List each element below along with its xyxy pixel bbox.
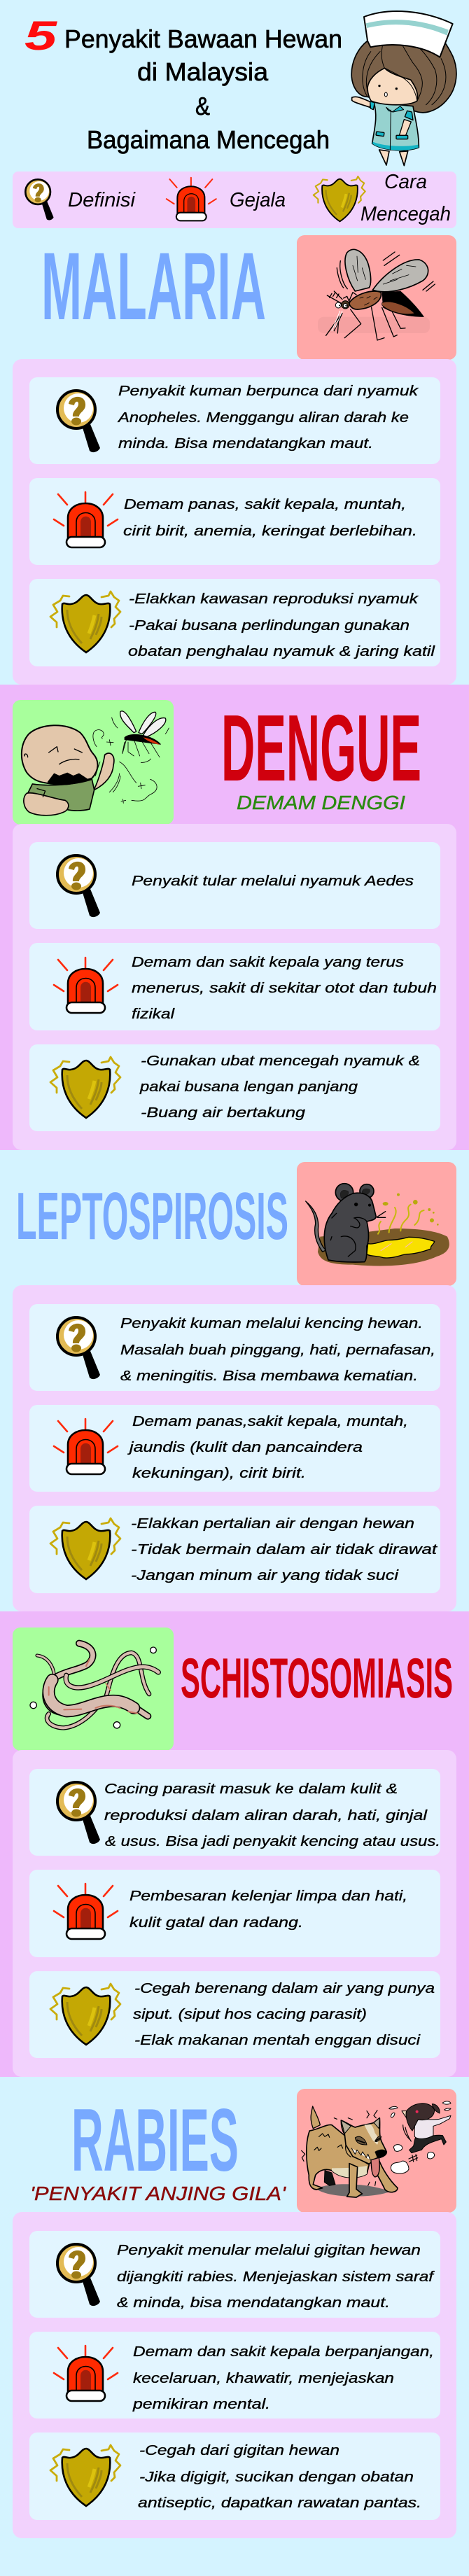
text: malaria definition bbox=[117, 383, 419, 451]
text: rabies symptoms: pemikiran mental. bbox=[132, 2396, 270, 2412]
text: dengue symptoms: menerus, sakit di sekitar otot dan tubuh bbox=[132, 980, 437, 996]
illustration card: mosquito bbox=[297, 235, 456, 360]
legend icon: siren bbox=[167, 178, 216, 220]
icon: shield bbox=[50, 592, 120, 652]
text: dengue definition: Penyakit tular melalui nyamuk Aedes bbox=[132, 873, 414, 889]
icon: shield bbox=[50, 1518, 120, 1579]
text: rabies prevention: -Jika digigit, sucikan dengan obatan bbox=[139, 2469, 414, 2485]
title bbox=[24, 13, 342, 154]
text: rabies prevention: antiseptic, dapatkan rawatan pantas. bbox=[138, 2495, 421, 2511]
text: schistosomiasis definition: Cacing parasit masuk ke dalam kulit & bbox=[104, 1781, 398, 1797]
icon: shield bbox=[50, 1984, 120, 2045]
title line 2: di Malaysia bbox=[137, 57, 269, 86]
text: rabies symptoms: kecelaruan, khawatir, menjejaskan bbox=[133, 2370, 394, 2386]
text: malaria symptoms: Demam panas, sakit kepala, muntah, bbox=[124, 496, 406, 512]
text: leptospirosis definition bbox=[120, 1315, 435, 1384]
text: dengue prevention: -Gunakan ubat mencegah nyamuk & bbox=[141, 1053, 420, 1069]
text: leptospirosis symptoms: Demam panas,sakit kepala, muntah, bbox=[132, 1413, 408, 1429]
illustration card: rabid dog chasing girl bbox=[297, 2089, 456, 2213]
text: schistosomiasis symptoms: kulit gatal dan radang. bbox=[130, 1914, 303, 1931]
icon: magnifier bbox=[57, 391, 100, 452]
title line 4: Bagaimana Mencegah bbox=[87, 125, 330, 154]
text: malaria symptoms bbox=[123, 496, 417, 539]
legend label: definisi: Definisi bbox=[68, 189, 136, 211]
title ampersand: & bbox=[195, 92, 210, 120]
text: dengue symptoms bbox=[132, 954, 437, 1022]
panel: schistosomiasis bbox=[13, 1750, 456, 2077]
subheading: demam denggi: DEMAM DENGGI bbox=[237, 792, 405, 813]
panel: dengue bbox=[13, 824, 456, 1150]
icon: siren bbox=[54, 958, 118, 1013]
icon: siren bbox=[54, 1884, 118, 1939]
card: leptospirosis prevention bbox=[29, 1506, 440, 1593]
text: malaria prevention bbox=[128, 591, 436, 659]
illustration card: parasitic worms bbox=[13, 1628, 174, 1751]
text: leptospirosis symptoms: kekuningan), cirit birit. bbox=[132, 1465, 306, 1481]
icon: magnifier bbox=[57, 2244, 100, 2306]
text: leptospirosis prevention bbox=[131, 1516, 438, 1583]
text: dengue prevention: pakai busana lengan panjang bbox=[139, 1079, 358, 1095]
card: malaria prevention bbox=[29, 579, 440, 666]
text: schistosomiasis symptoms bbox=[130, 1888, 407, 1931]
text: malaria prevention: -Pakai busana perlindungan gunakan bbox=[129, 617, 410, 634]
text: rabies symptoms bbox=[132, 2344, 434, 2412]
text: leptospirosis prevention: -Elakkan pertalian air dengan hewan bbox=[131, 1516, 414, 1532]
icon: siren bbox=[54, 1419, 118, 1474]
text: dengue prevention: -Buang air bertakung bbox=[141, 1105, 306, 1121]
legend icon: shield bbox=[314, 176, 365, 221]
legend label: cara mencegah: Cara bbox=[384, 171, 427, 193]
text: leptospirosis prevention: -Jangan minum air yang tidak suci bbox=[131, 1567, 400, 1583]
card: rabies definition bbox=[29, 2231, 440, 2318]
subheading: penyakit anjing gila: 'PENYAKIT ANJING GILA' bbox=[30, 2183, 287, 2204]
text: dengue symptoms: fizikal bbox=[132, 1006, 176, 1022]
card: dengue prevention bbox=[29, 1044, 440, 1131]
legend icon: magnifier bbox=[25, 179, 54, 220]
card: schistosomiasis symptoms bbox=[29, 1870, 440, 1957]
legend label: cara mencegah: Mencegah bbox=[360, 203, 451, 225]
section band: schistosomiasis bbox=[0, 1611, 469, 2077]
icon: shield bbox=[50, 1057, 120, 1118]
panel: rabies bbox=[13, 2212, 456, 2538]
icon: magnifier bbox=[57, 1317, 100, 1379]
text: leptospirosis definition: & meningitis. Bisa membawa kematian. bbox=[120, 1368, 418, 1384]
text: rabies definition bbox=[117, 2242, 435, 2311]
text: schistosomiasis symptoms: Pembesaran kelenjar limpa dan hati, bbox=[130, 1888, 407, 1904]
card: leptospirosis symptoms bbox=[29, 1405, 440, 1492]
icon: siren bbox=[54, 492, 118, 547]
text: rabies definition: & minda, bisa mendatangkan maut. bbox=[117, 2295, 390, 2311]
icon: magnifier bbox=[57, 1782, 100, 1844]
card: leptospirosis definition bbox=[29, 1304, 440, 1391]
legend bar bbox=[13, 171, 456, 228]
text: leptospirosis definition: Penyakit kuman melalui kencing hewan. bbox=[120, 1315, 423, 1331]
legend label: cara mencegah bbox=[360, 171, 451, 225]
panel: leptospirosis bbox=[13, 1285, 456, 1611]
text: malaria definition: minda. Bisa mendatangkan maut. bbox=[118, 435, 373, 451]
card: dengue symptoms bbox=[29, 943, 440, 1030]
text: malaria symptoms: cirit birit, anemia, keringat berlebihan. bbox=[123, 523, 417, 539]
text: rabies prevention bbox=[138, 2442, 421, 2511]
card: schistosomiasis prevention bbox=[29, 1971, 440, 2058]
panel: malaria bbox=[13, 359, 456, 685]
text: malaria definition: Penyakit kuman berpunca dari nyamuk bbox=[118, 383, 419, 399]
text: dengue prevention bbox=[139, 1053, 420, 1121]
illustration card: rat bbox=[297, 1162, 456, 1286]
text: malaria prevention: obatan penghalau nyamuk & jaring katil bbox=[128, 643, 436, 659]
card: dengue definition bbox=[29, 842, 440, 929]
card: rabies prevention bbox=[29, 2432, 440, 2520]
text: leptospirosis prevention: -Tidak bermain dalam air tidak dirawat bbox=[131, 1541, 438, 1558]
text: schistosomiasis definition: reproduksi dalam aliran darah, hati, ginjal bbox=[104, 1807, 428, 1823]
text: schistosomiasis definition bbox=[104, 1781, 440, 1849]
text: schistosomiasis prevention: -Cegah berenang dalam air yang punya bbox=[134, 1980, 435, 1996]
section band: dengue bbox=[0, 685, 469, 1150]
legend label: gejala: Gejala bbox=[230, 189, 286, 211]
text: schistosomiasis prevention: -Elak makanan mentah enggan disuci bbox=[134, 2032, 421, 2048]
text: leptospirosis definition: Masalah buah pinggang, hati, pernafasan, bbox=[120, 1342, 435, 1358]
text: rabies symptoms: Demam dan sakit kepala berpanjangan, bbox=[133, 2344, 434, 2360]
card: malaria symptoms bbox=[29, 478, 440, 565]
text: malaria definition: Anopheles. Menggangu aliran darah ke bbox=[117, 410, 409, 426]
text: rabies prevention: -Cegah dari gigitan hewan bbox=[139, 2442, 340, 2458]
icon: magnifier bbox=[57, 855, 100, 917]
icon: shield bbox=[50, 2445, 120, 2506]
icon: siren bbox=[54, 2346, 118, 2401]
title line 1: Penyakit Bawaan Hewan bbox=[64, 24, 342, 53]
text: rabies definition: dijangkiti rabies. Menjejaskan sistem saraf bbox=[117, 2269, 435, 2285]
text: schistosomiasis prevention: siput. (siput hos cacing parasit) bbox=[133, 2006, 367, 2022]
infographic page: RABIES bbox=[71, 2090, 239, 2190]
card: rabies symptoms bbox=[29, 2332, 440, 2418]
illustration: nurse bbox=[351, 11, 456, 166]
text: dengue symptoms: Demam dan sakit kepala yang terus bbox=[132, 954, 404, 970]
text: malaria prevention: -Elakkan kawasan reproduksi nyamuk bbox=[129, 591, 419, 607]
text: leptospirosis symptoms: jaundis (kulit dan pancaindera bbox=[127, 1439, 363, 1455]
text: schistosomiasis prevention bbox=[133, 1980, 435, 2048]
text: leptospirosis symptoms bbox=[127, 1413, 408, 1481]
number five: 5 bbox=[24, 13, 57, 59]
illustration card: man and mosquito bbox=[13, 700, 174, 825]
card: malaria definition bbox=[29, 377, 440, 464]
text: schistosomiasis definition: & usus. Bisa jadi penyakit kencing atau usus. bbox=[105, 1833, 440, 1849]
card: schistosomiasis definition bbox=[29, 1769, 440, 1856]
text: rabies definition: Penyakit menular melalui gigitan hewan bbox=[117, 2242, 421, 2258]
